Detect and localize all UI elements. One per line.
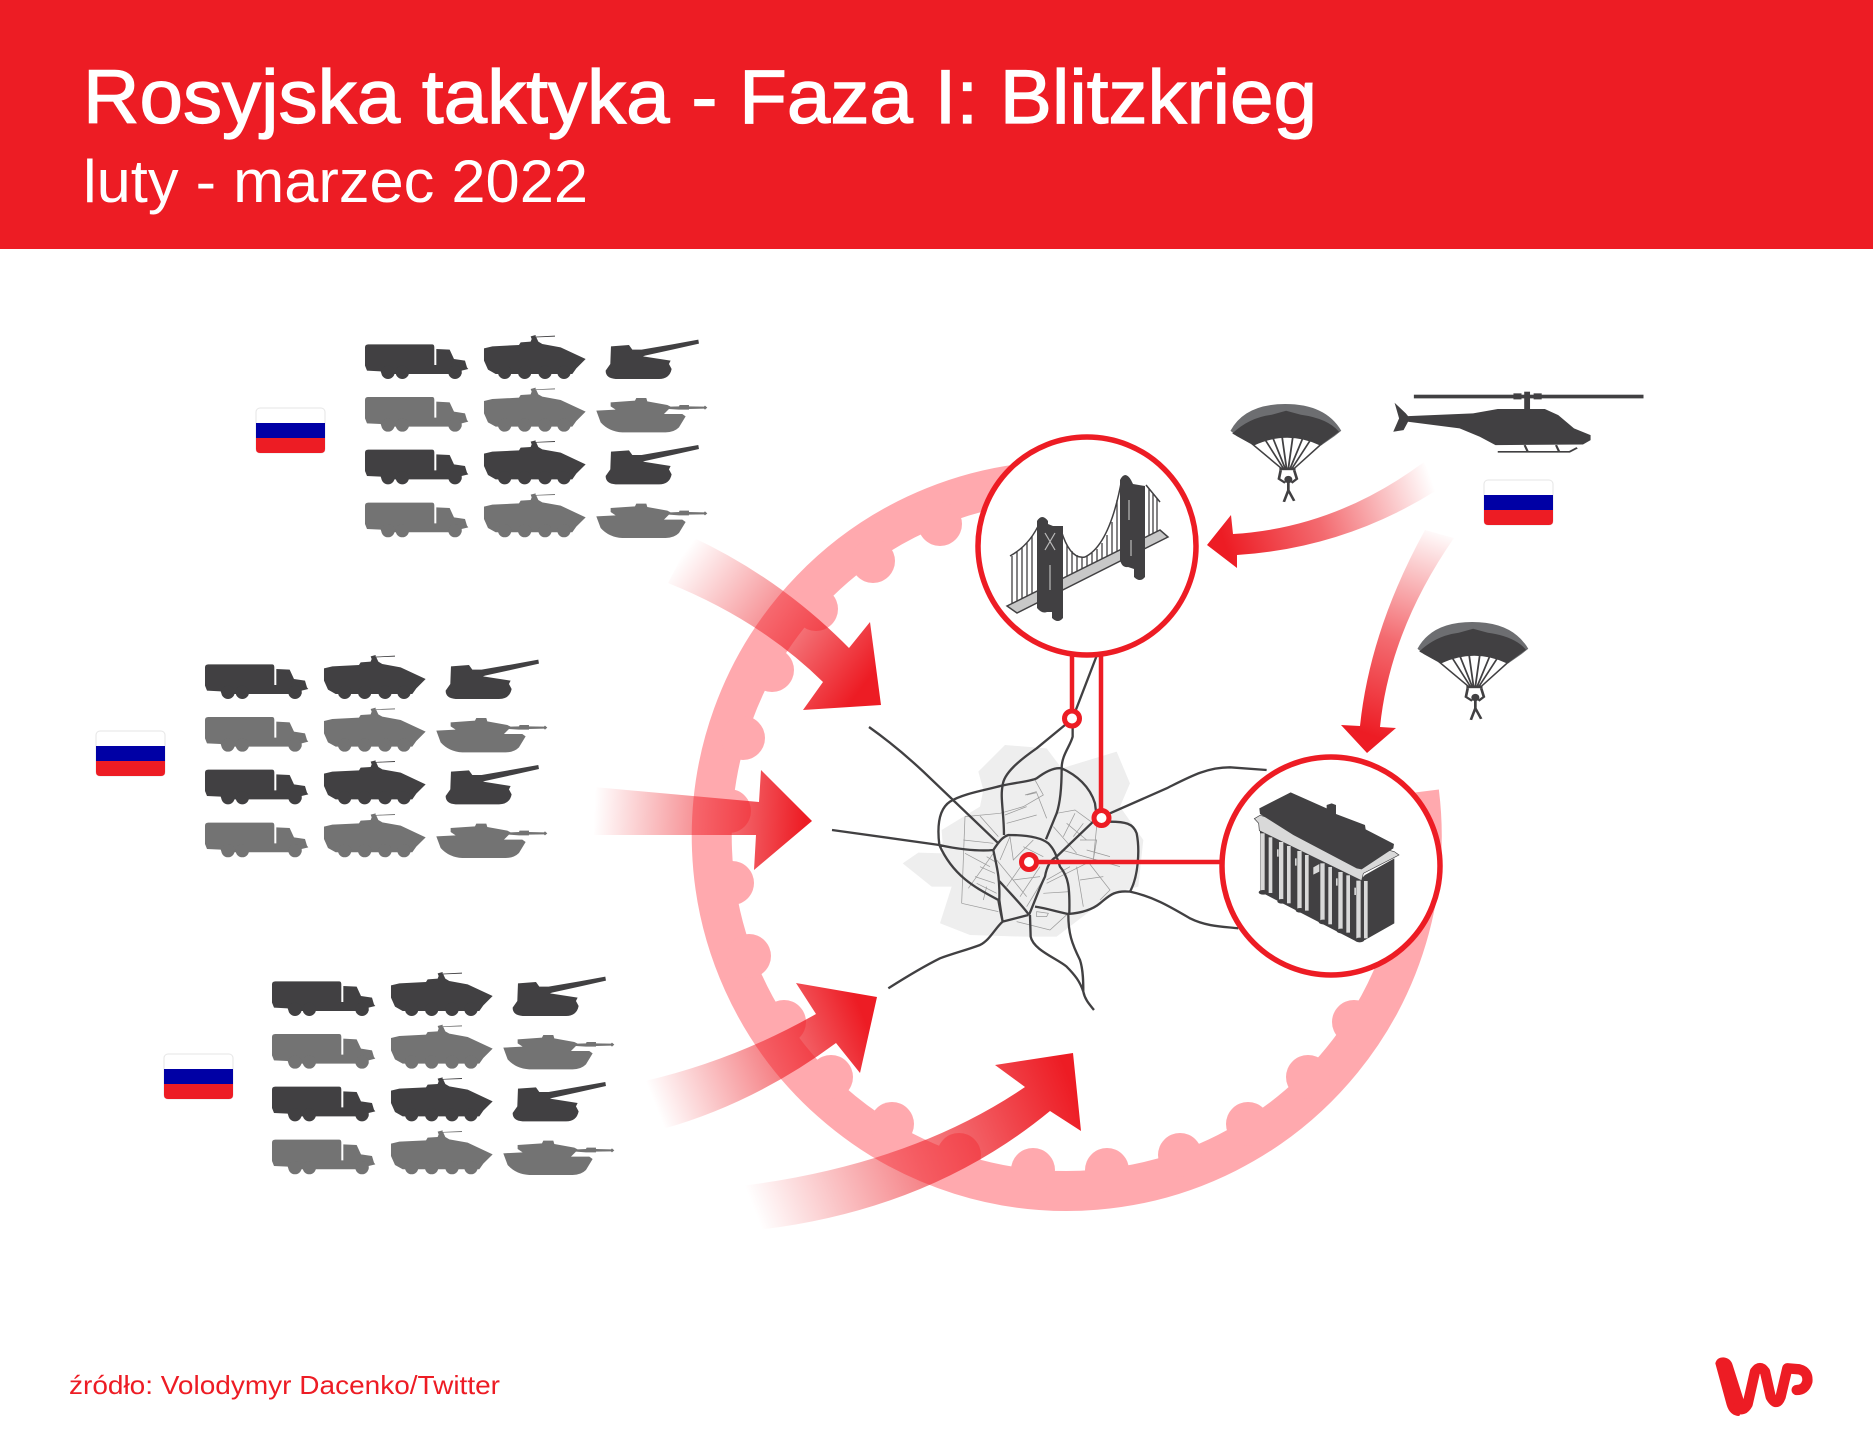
arrow: attack bottom — [741, 1053, 1081, 1230]
title: Rosyjska taktyka - Faza I: Blitzkrieg — [83, 55, 1317, 140]
vehicle group 3 — [272, 972, 614, 1175]
callout: government building — [1222, 757, 1440, 975]
icon: helicopter — [1393, 392, 1644, 452]
flag: Russia, column 2 — [96, 731, 165, 776]
icon: paratrooper 1 — [1230, 404, 1341, 502]
logo: WP — [1715, 1357, 1807, 1416]
callout: bridge — [978, 437, 1196, 655]
flag: Russia, column 1 — [256, 408, 325, 453]
arrow: airborne to bridge — [1207, 462, 1437, 568]
arrow: attack left — [594, 770, 812, 870]
red connector lines and city markers — [1022, 650, 1225, 870]
vehicle group 2 — [205, 655, 547, 858]
flag: Russia, airborne — [1484, 480, 1553, 525]
arrow: attack lower left — [645, 983, 877, 1129]
subtitle: luty - marzec 2022 — [83, 148, 588, 215]
icon: columned building — [1254, 792, 1399, 942]
arrow: airborne to building — [1341, 530, 1454, 753]
encirclement ring with inner bumps — [707, 481, 1422, 1192]
vehicle group 1 — [365, 335, 707, 538]
icon: bridge — [1007, 475, 1168, 621]
arrow: attack top left — [668, 537, 881, 710]
icon: paratrooper 2 — [1417, 622, 1528, 720]
city map with roads — [832, 655, 1267, 1010]
source note: źródło: Volodymyr Dacenko/Twitter — [69, 1370, 500, 1400]
header band — [0, 0, 1873, 249]
flag: Russia, column 3 — [164, 1054, 233, 1099]
